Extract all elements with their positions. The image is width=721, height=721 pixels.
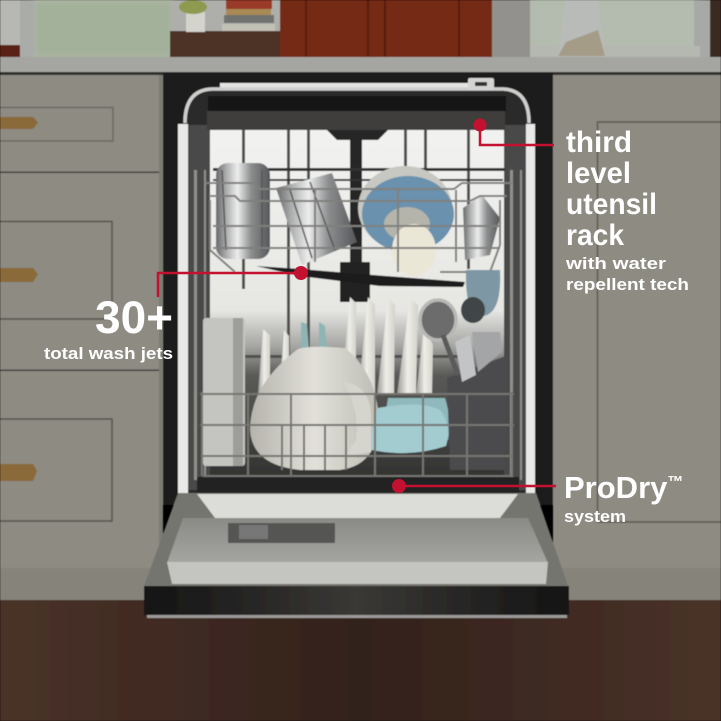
toe kick: [0, 568, 721, 601]
callout: third level rack leader: [474, 118, 554, 145]
tub interior dark: [186, 89, 528, 495]
upper rack back wires: [213, 168, 505, 181]
glass containers: [216, 163, 500, 265]
text: third level utensil rack: level: [566, 157, 631, 190]
text: ProDry system: [564, 470, 683, 526]
text: third level utensil rack: repellent tech: [566, 276, 689, 294]
dishwasher frame: [163, 73, 553, 505]
pan: [203, 318, 245, 466]
white side liners: [178, 124, 188, 496]
silver arch trim: [185, 89, 529, 123]
teal tabs: [301, 322, 327, 350]
text: ProDry system: ™: [667, 474, 683, 491]
countertop: [0, 57, 721, 73]
vase: [558, 0, 605, 56]
stacked plates: [358, 166, 454, 276]
whisk and spatula: [420, 270, 500, 375]
utensil basket: [447, 355, 508, 470]
upper dark vent and grey bar: [208, 96, 506, 112]
text: 30+ total wash jets: [44, 292, 173, 363]
rack bottom darkness: [197, 477, 519, 493]
window and wall: [0, 0, 721, 58]
text: third level utensil rack: third: [566, 126, 632, 159]
latch: [468, 78, 494, 90]
back wall: [197, 129, 519, 491]
side wall highlights: [194, 170, 522, 480]
lower rack wires: [200, 392, 514, 476]
spray arm: [256, 266, 465, 287]
callout: ProDry leader: [392, 479, 556, 493]
silverware: [455, 332, 502, 382]
white jug: [250, 347, 379, 470]
vertical back bars: [240, 129, 470, 359]
door front panel: [144, 586, 569, 615]
open door interior: [144, 493, 568, 586]
cabinet left: [0, 75, 163, 569]
text: third level utensil rack: [565, 126, 689, 294]
text: third level utensil rack: with water: [565, 255, 667, 273]
upper rack wires: [205, 183, 512, 272]
teal bowls: [372, 398, 449, 453]
lower rack plates: [258, 297, 433, 395]
shelf, books and plant: [170, 0, 280, 58]
text: third level utensil rack: utensil: [566, 188, 657, 221]
text: ProDry system: ProDry: [564, 470, 667, 505]
text: 30+ total wash jets: 30+: [95, 292, 173, 343]
text: third level utensil rack: rack: [566, 219, 624, 252]
top trim: [220, 83, 480, 88]
central water column: [327, 130, 388, 300]
side walls shading: [188, 125, 210, 490]
cabinet right: [553, 75, 721, 569]
red cabinet: [280, 0, 492, 58]
text: 30+ total wash jets: total wash jets: [44, 345, 173, 363]
floor: [0, 600, 721, 721]
text: ProDry system: system: [564, 508, 626, 526]
callout: wash jets leader: [158, 266, 308, 297]
